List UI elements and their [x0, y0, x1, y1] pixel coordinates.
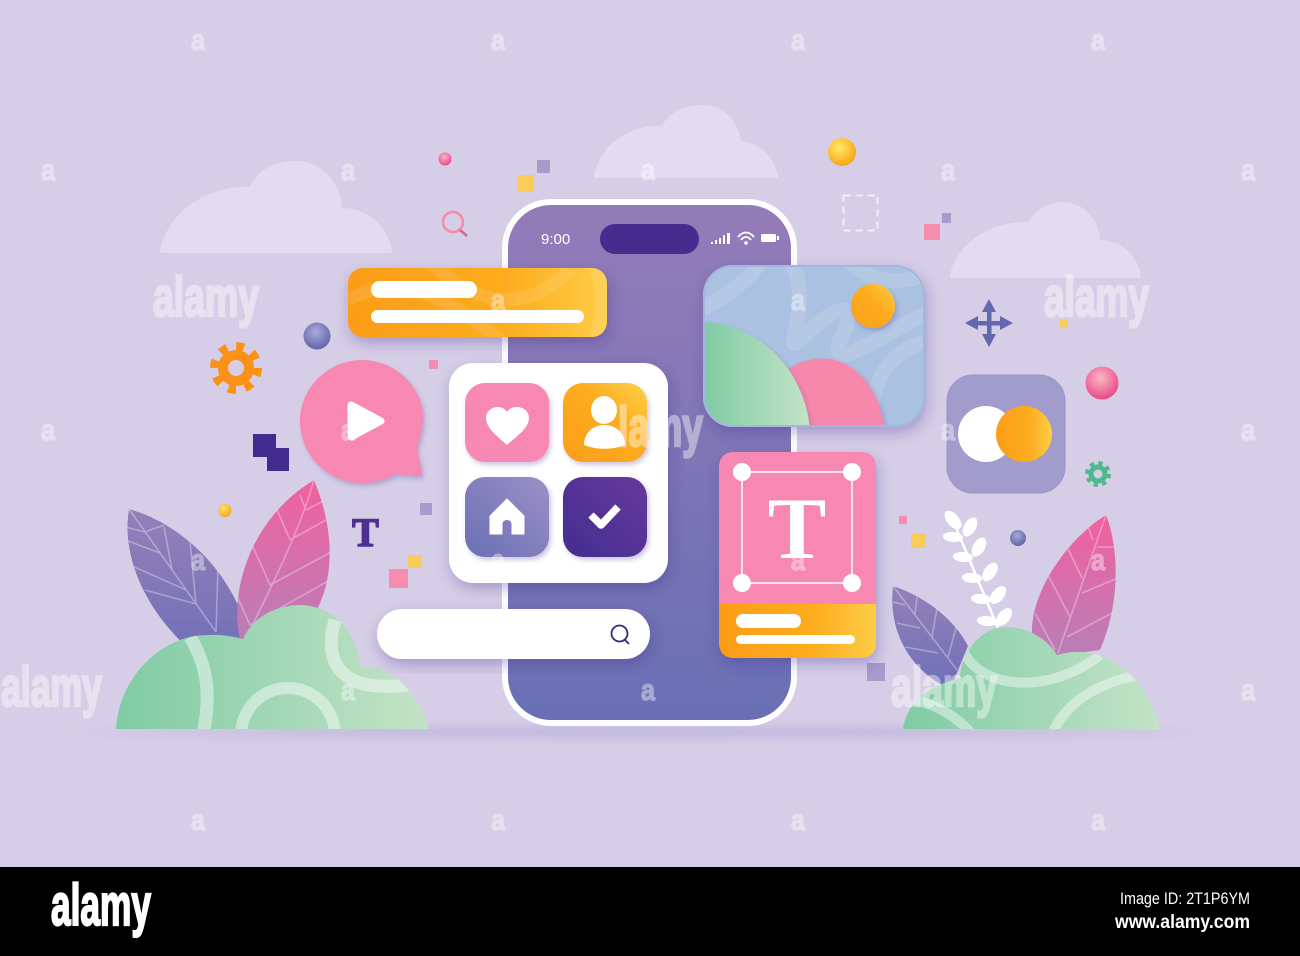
footer bar	[0, 867, 1300, 956]
watermark text: lamy	[618, 395, 703, 458]
text edit card	[719, 452, 876, 658]
icon: green gear	[1087, 463, 1109, 485]
cloud: top	[594, 105, 778, 178]
plant: right white sprig	[941, 508, 1015, 629]
watermark text: a	[1241, 154, 1255, 187]
watermark text: alamy	[153, 265, 259, 328]
watermark text: a	[791, 24, 805, 57]
icon: magnifier pink	[443, 212, 467, 236]
status icons	[711, 232, 779, 245]
watermark text: a	[491, 804, 505, 837]
icon: layered squares	[253, 434, 289, 471]
watermark text: a	[191, 804, 205, 837]
footer logo: alamy	[51, 873, 151, 938]
decorative squares and balls	[218, 138, 1118, 681]
watermark text: a	[791, 284, 805, 317]
icon: move arrows	[965, 299, 1013, 347]
tile: user	[563, 383, 647, 462]
overlap circles tile	[947, 375, 1065, 493]
search bar	[377, 609, 650, 659]
notch	[600, 224, 699, 254]
plant: right bush	[900, 627, 1160, 732]
icon: orange gear	[214, 346, 258, 390]
website: www.alamy.com	[1114, 912, 1250, 933]
tile: home	[465, 477, 549, 557]
app grid card	[449, 363, 668, 583]
watermark text: a	[941, 154, 955, 187]
plant: left bush	[116, 605, 429, 729]
tile: check	[563, 477, 647, 557]
watermark text: a	[41, 154, 55, 187]
watermark text: a	[791, 544, 805, 577]
video bubble	[300, 360, 423, 483]
watermark text: a	[491, 544, 505, 577]
image id: Image ID: 2T1P6YM	[1120, 889, 1250, 908]
selection frame	[733, 463, 861, 592]
image card	[700, 260, 930, 430]
big T: T	[768, 481, 826, 578]
plant: left leaves	[128, 480, 330, 640]
tile: heart	[465, 383, 549, 462]
watermark text: a	[941, 414, 955, 447]
status bar time: 9:00	[541, 231, 570, 248]
sun	[851, 284, 895, 328]
watermark text: a	[791, 804, 805, 837]
watermark text: a	[641, 154, 655, 187]
cloud: right	[950, 202, 1141, 278]
watermark text: alamy	[1, 655, 102, 718]
watermark text: alamy	[891, 655, 997, 718]
hill green	[703, 322, 810, 430]
watermark text: a	[41, 414, 55, 447]
watermark text: a	[341, 674, 355, 707]
ground shadow	[40, 725, 1240, 739]
watermark text: a	[491, 24, 505, 57]
watermark text: a	[491, 284, 505, 317]
watermark text: a	[191, 24, 205, 57]
plant: right leaves	[892, 515, 1118, 690]
watermark text: a	[1241, 674, 1255, 707]
watermark text: a	[341, 154, 355, 187]
watermark text: a	[641, 674, 655, 707]
watermark text: a	[341, 414, 355, 447]
watermark text: a	[1091, 24, 1105, 57]
watermark text: a	[191, 544, 205, 577]
phone	[505, 202, 794, 723]
hill pink	[785, 358, 885, 430]
icon: small T: T	[352, 510, 379, 555]
watermark text: a	[1091, 544, 1105, 577]
watermark text: a	[1241, 414, 1255, 447]
icon: dashed selection	[844, 196, 878, 230]
watermark text: alamy	[1044, 265, 1149, 328]
watermark text: a	[1091, 804, 1105, 837]
orange message banner	[348, 262, 607, 340]
cloud: left	[160, 161, 392, 253]
